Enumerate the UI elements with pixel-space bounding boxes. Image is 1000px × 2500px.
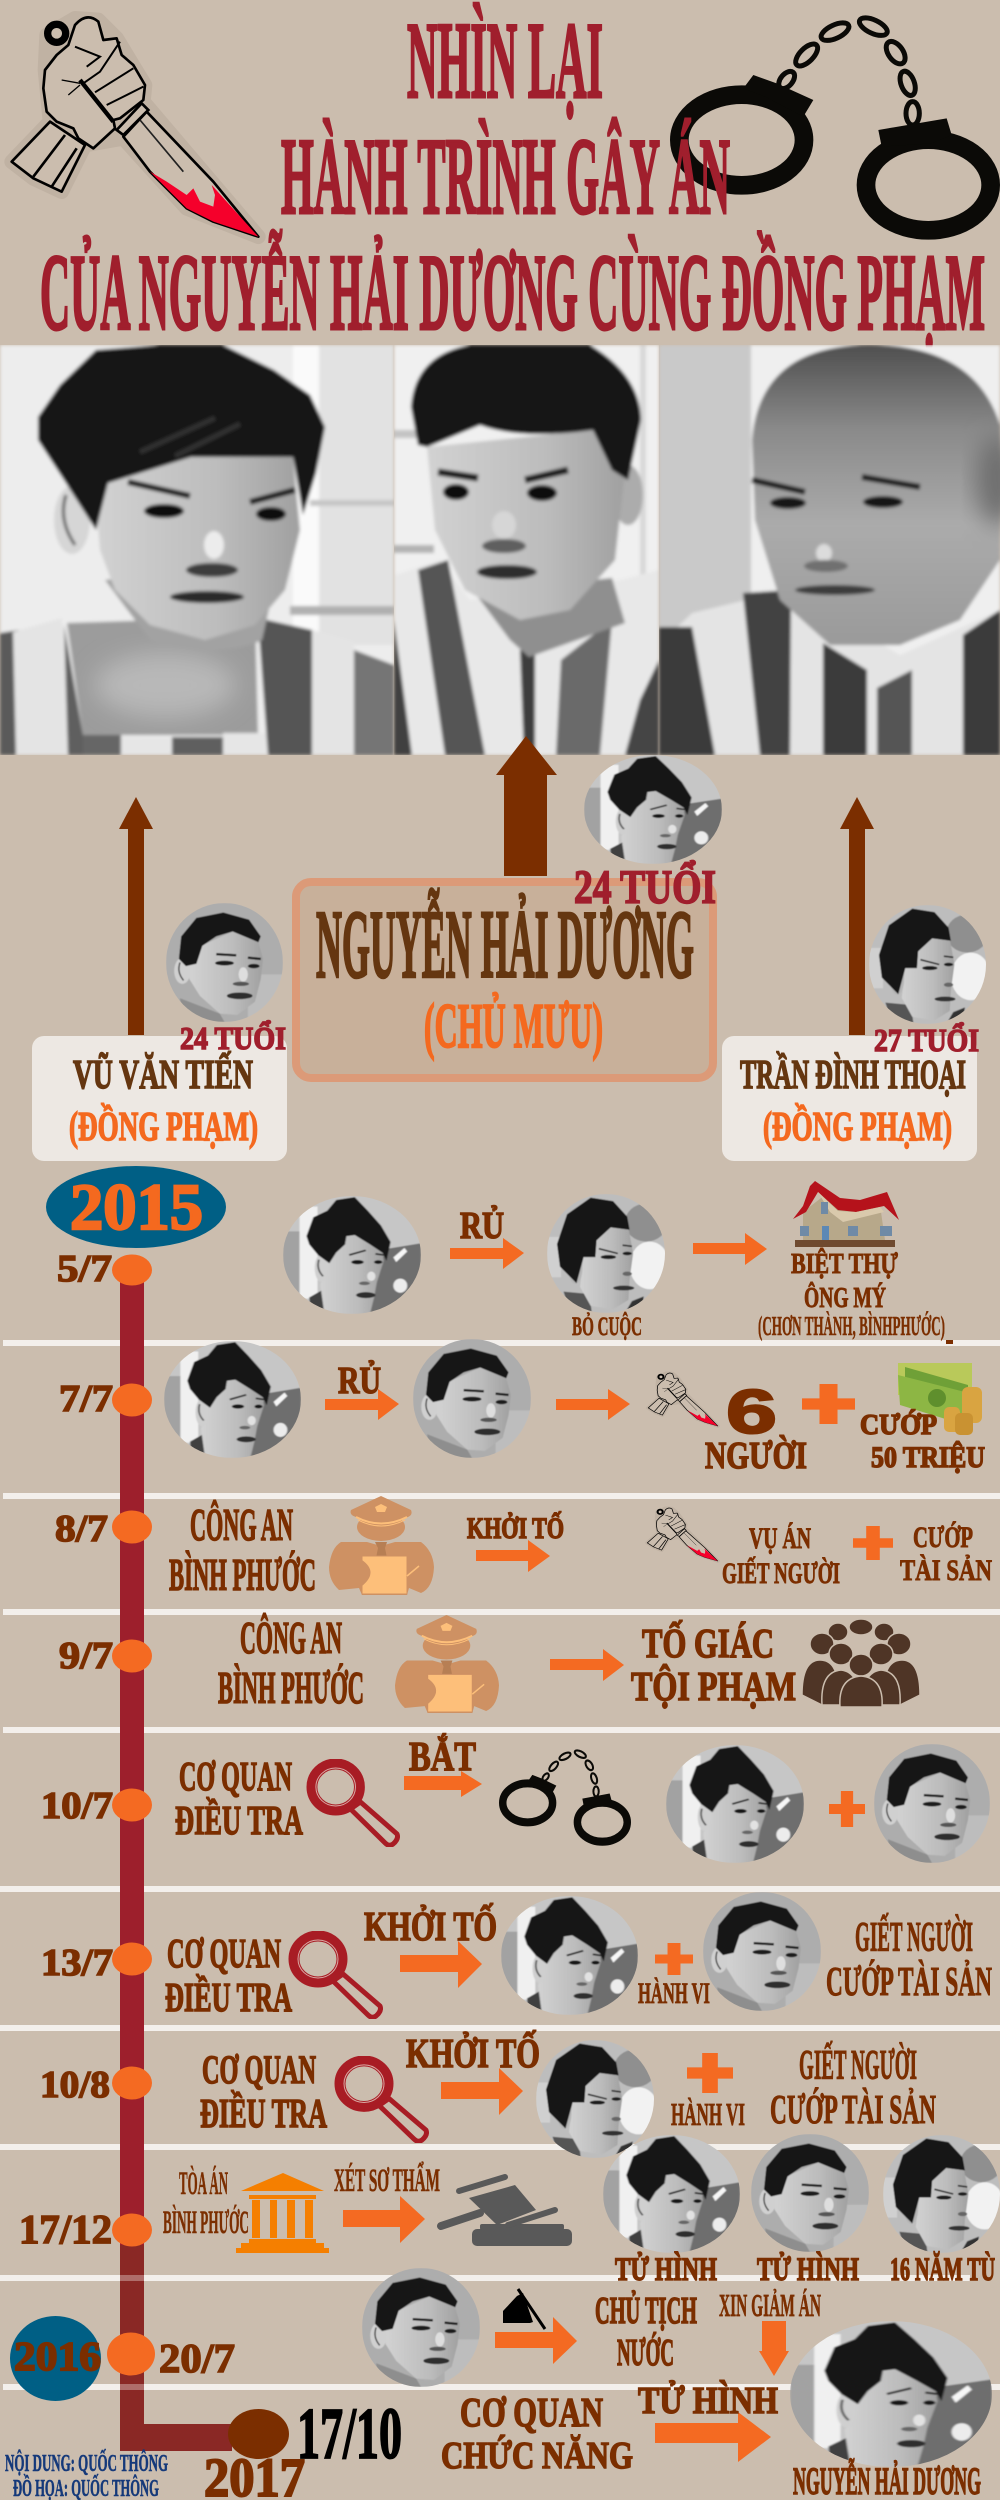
timeline dot [112,1788,152,1822]
title: NHÌN LẠI [407,0,603,121]
row: 9/7: BÌNH PHƯỚC [218,1663,364,1713]
row: 10/8: ĐIỀU TRA [200,2090,327,2136]
label: acts: HÀNH VI [638,1977,710,2010]
icon: knife [648,1373,718,1426]
label: prosecute: KHỞI TỐ [364,1903,497,1949]
arrow [400,1941,482,1988]
plus [802,1384,855,1424]
row: 17/12: BÌNH PHƯỚC [163,2203,249,2241]
age: Dương: 24 TUỔI [574,859,716,914]
label: prosecute: KHỞI TỐ [467,1511,564,1545]
row: 17/10: CHỨC NĂNG [441,2435,633,2477]
photo: Nguyễn Hải Dương [394,345,659,755]
arrow [343,2196,425,2243]
label: authorities: CƠ QUAN [460,2389,603,2435]
label: withdrew: BỎ CUỘC [572,1312,642,1341]
label: robbed: CƯỚP [860,1408,937,1441]
icon: handcuffs [679,14,991,230]
panel: main suspect box [296,882,713,1078]
arrow: Nguyễn Hải Dương [496,736,557,876]
timeline line [120,1275,232,2451]
badge: 2015 [46,1166,226,1248]
icon: crowd [802,1619,920,1707]
portrait: Tiến [166,903,283,1022]
row: 10/8 [40,2030,936,2158]
title [40,0,985,353]
arrow [476,1540,550,1572]
row: 5/7 [57,1181,953,1344]
age: Thoại: 27 TUỔI [874,1022,979,1058]
photo: Vũ Văn Tiến [0,345,394,755]
row: 7/7 [59,1339,985,1477]
label: prosecute: KHỞI TỐ [406,2030,540,2076]
timeline dot [228,2409,289,2459]
row: 20/7 [10,2268,821,2401]
portrait: Dương [283,1196,421,1314]
row: 9/7: CÔNG AN [240,1613,342,1663]
label: death sentence: TỬ HÌNH [638,2380,778,2422]
credits [5,2450,168,2500]
icon: money [898,1363,982,1435]
icon: magnifier [312,1764,398,1845]
date: 20/7 [159,2335,235,2381]
plus [853,1526,893,1560]
label: denounce: TỐ GIÁC [642,1620,774,1666]
label: invites: RỦ [460,1205,504,1247]
plus [655,1943,693,1975]
date: 5/7 [57,1248,112,1290]
icon: signing hand [503,2289,545,2329]
portrait: Dương large [790,2321,992,2467]
panel: Vũ Văn Tiến: VŨ VĂN TIẾN [73,1051,253,1097]
icon: knife in hand [12,17,258,237]
row: 8/7: GIẾT NGƯỜI [722,1556,840,1590]
label: arrest: BẮT [409,1733,476,1779]
row: 8/7: CÔNG AN [190,1500,293,1550]
label: acts: HÀNH VI [671,2096,745,2132]
row: 5/7: ÔNG MÝ [804,1281,886,1314]
arrow [404,1771,482,1797]
credits: NỘI DUNG: QUỐC THÔNG [5,2450,168,2477]
arrow: Trần Đình Thoại [840,797,874,1035]
arrow [450,1238,524,1269]
icon: magnifier [294,1936,380,2017]
portrait: Dương [603,2135,740,2253]
portrait: Thoại [869,905,991,1024]
row: 13/7 [41,1892,992,2020]
arrow: down [759,2321,789,2376]
plus [687,2053,733,2093]
badge: 2016 [10,2316,101,2401]
panel: Vũ Văn Tiến: (ĐỒNG PHẠM) [69,1103,258,1149]
portrait: Dương [666,1745,804,1863]
portrait: Tiến [874,1744,990,1863]
label: president: CHỦ TỊCH [595,2290,697,2332]
number killed: 6 [726,1378,777,1447]
portrait: Tiến [751,2134,869,2252]
label: investigators: CƠ QUAN [202,2047,316,2092]
timeline dot [112,2214,152,2246]
badge: 2015: 2015 [70,1171,203,1244]
portrait: Thoại [547,1194,670,1313]
panel: Trần Đình Thoại [722,1036,977,1161]
row: 13/7: ĐIỀU TRA [165,1974,292,2020]
timeline dot [112,1384,152,1416]
timeline dot [112,1640,152,1672]
label: robbery: CƯỚP [913,1521,973,1554]
timeline dot [107,2332,155,2376]
timeline dot [112,1254,152,1286]
icon: magnifier [340,2061,426,2141]
portrait: Tiến [413,1339,531,1458]
icon: handcuffs [503,1749,627,1842]
age: Tiến: 24 TUỔI [180,1020,286,1056]
row: 10/7: ĐIỀU TRA [175,1797,303,1843]
date: 10/7 [41,1785,113,1827]
label: 2016: 2016 [14,2333,101,2379]
label: investigators: CƠ QUAN [179,1753,292,1799]
row: 17/10 [204,2321,992,2500]
row: 8/7: BÌNH PHƯỚC [169,1550,316,1600]
arrow [556,1389,630,1420]
portrait: Dương [501,1896,638,2015]
row: 9/7: TỘI PHẠM [631,1663,796,1709]
portrait: Thoại [536,2040,659,2158]
date: 8/7 [55,1508,108,1550]
label: death sentence: TỬ HÌNH [615,2250,717,2288]
icon: house [793,1181,899,1247]
portrait: Thoại [883,2135,1000,2253]
label: case: VỤ ÁN [749,1522,811,1555]
timeline dot [112,1510,152,1544]
icon: courthouse [236,2173,329,2253]
icon: gavel [441,2177,572,2246]
date: 17/12 [19,2206,112,2252]
row: 17/12: XÉT SƠ THẨM [334,2161,440,2199]
row: 7/7: 50 TRIỆU [871,1441,985,1474]
row: 17/12 [19,2134,1000,2288]
arrow [550,1649,624,1681]
row: 8/7 [55,1496,992,1600]
timeline dot [112,2066,152,2100]
icon: officer [395,1615,499,1713]
date: 9/7 [59,1635,113,1677]
date: 7/7 [59,1378,113,1420]
icon: knife [647,1508,718,1561]
label: villa: BIỆT THỰ [791,1247,898,1280]
photo: Trần Đình Thoại [659,345,1000,755]
arrow [655,2412,771,2462]
row: 9/7 [59,1613,920,1713]
label: invites: RỦ [338,1360,381,1402]
label: death sentence: TỬ HÌNH [757,2250,859,2288]
timeline dot [112,1942,152,1976]
panel: Vũ Văn Tiến [32,1036,287,1161]
arrow: Vũ Văn Tiến [119,797,153,1035]
plus [829,1791,865,1827]
label: people: NGƯỜI [705,1435,807,1477]
portrait: Tiến [362,2268,480,2387]
row: 20/7: NƯỚC [617,2332,674,2374]
arrow [693,1233,767,1265]
icon: officer [329,1496,434,1595]
label: investigators: CƠ QUAN [167,1930,281,1976]
text: XIN GIẢM ÁN [719,2287,821,2323]
text: (CHỦ MƯU) [424,990,603,1061]
date: 10/8 [40,2064,110,2106]
portrait: Tiến [703,1892,821,2011]
arrow [495,2317,577,2364]
arrow [441,2068,523,2115]
portrait: Dương [584,755,722,864]
row: 10/7 [41,1733,990,1863]
date: 17/10 [297,2393,402,2474]
date: 13/7 [41,1942,113,1984]
arrow [325,1389,399,1420]
portrait: Dương [164,1341,301,1458]
row: 17/12: TÒA ÁN [179,2164,228,2202]
